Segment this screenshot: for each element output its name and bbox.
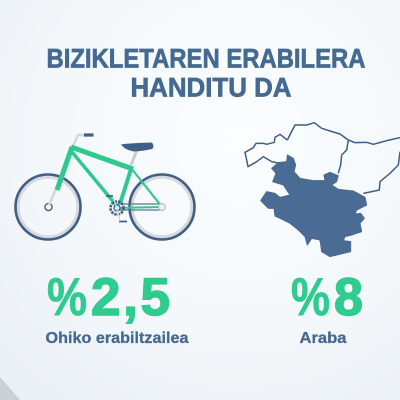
stat: %2,5 xyxy=(46,268,189,347)
rear hub xyxy=(159,204,165,210)
map outline: northern provinces xyxy=(245,123,400,193)
stat: %8: % xyxy=(291,268,330,327)
stat: %8 xyxy=(291,268,363,347)
title xyxy=(46,44,366,102)
chainring and pedals xyxy=(106,196,127,222)
title: BIZIKLETAREN ERABILERA xyxy=(46,44,366,74)
title: HANDITU DA xyxy=(130,72,292,102)
map fill: Araba xyxy=(261,155,367,257)
left wheel xyxy=(16,174,80,240)
green frame xyxy=(57,147,162,208)
stat: %2,5: 2,5 xyxy=(91,268,170,327)
right wheel xyxy=(130,174,194,240)
stat: %2,5: % xyxy=(47,268,87,327)
stat label: Ohiko erabiltzailea xyxy=(46,330,189,347)
saddle xyxy=(121,142,154,152)
stat: %8: 8 xyxy=(334,268,363,327)
fork and handlebar stem xyxy=(49,135,84,205)
stat label: Araba xyxy=(300,330,347,347)
chain stays xyxy=(117,204,162,210)
seat post xyxy=(131,150,137,165)
icon: bicycle xyxy=(16,135,194,240)
map: Basque provinces xyxy=(245,123,400,257)
handlebar grip xyxy=(84,133,94,137)
